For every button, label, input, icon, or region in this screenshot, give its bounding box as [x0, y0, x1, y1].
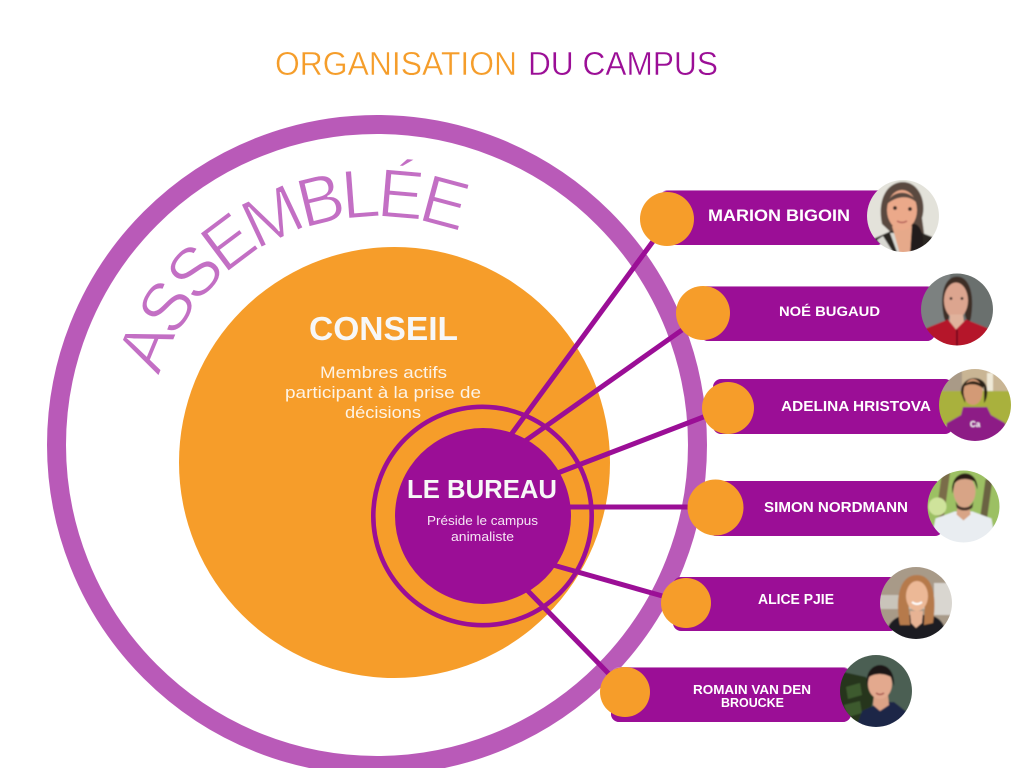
icon: portrait Alice — [880, 567, 952, 639]
member: Alice Pjie — [661, 566, 954, 643]
heading: conseil: CONSEIL — [309, 310, 458, 347]
text block: conseil description: décisions — [345, 403, 421, 422]
member: Alice Pjie: ALICE PJIE — [758, 592, 834, 608]
icon: portrait Romain — [839, 654, 913, 728]
panel: conseil circle — [179, 247, 610, 678]
member: Simon Nordmann: SIMON NORDMANN — [764, 500, 908, 516]
member: Romain Van Den Broucke: BROUCKE — [721, 696, 784, 710]
bureau outer ring — [373, 407, 592, 625]
icon: portrait Adelina: Ca — [970, 420, 981, 429]
text block: conseil description: Membres actifs — [320, 363, 447, 382]
member: Noé Bugaud — [676, 272, 994, 350]
text block: bureau description — [427, 513, 539, 544]
member: Adelina Hristova — [702, 368, 1012, 442]
member: Marion Bigoin: MARION BIGOIN — [708, 206, 850, 225]
text block: bureau description: Préside le campus — [427, 513, 539, 528]
member: Marion Bigoin — [640, 179, 940, 256]
icon: portrait Simon — [926, 466, 1000, 544]
title: ORGANISATION — [275, 45, 517, 82]
heading: le bureau: LE BUREAU — [407, 474, 557, 504]
connector lines — [510, 240, 706, 675]
icon: portrait Noé — [920, 272, 994, 350]
panel: assemblée outer ring — [56, 124, 698, 766]
member: Noé Bugaud: NOÉ BUGAUD — [779, 303, 880, 319]
text block: conseil description: participant à la prise de — [285, 383, 481, 402]
icon: portrait Adelina — [938, 368, 1012, 442]
title — [275, 45, 718, 82]
member: Romain Van Den Broucke: ROMAIN VAN DEN — [693, 683, 811, 697]
member: Adelina Hristova: ADELINA HRISTOVA — [781, 399, 932, 415]
icon: portrait Marion — [866, 179, 940, 256]
text block: bureau description: animaliste — [451, 529, 514, 544]
title: DU CAMPUS — [528, 45, 718, 82]
member: Romain Van Den Broucke — [600, 654, 913, 728]
panel: bureau circle — [395, 428, 571, 604]
member: Simon Nordmann — [688, 466, 1000, 544]
text block: conseil description — [285, 363, 481, 422]
heading: assemblée curved: ASSEMBLÉE — [123, 159, 468, 375]
